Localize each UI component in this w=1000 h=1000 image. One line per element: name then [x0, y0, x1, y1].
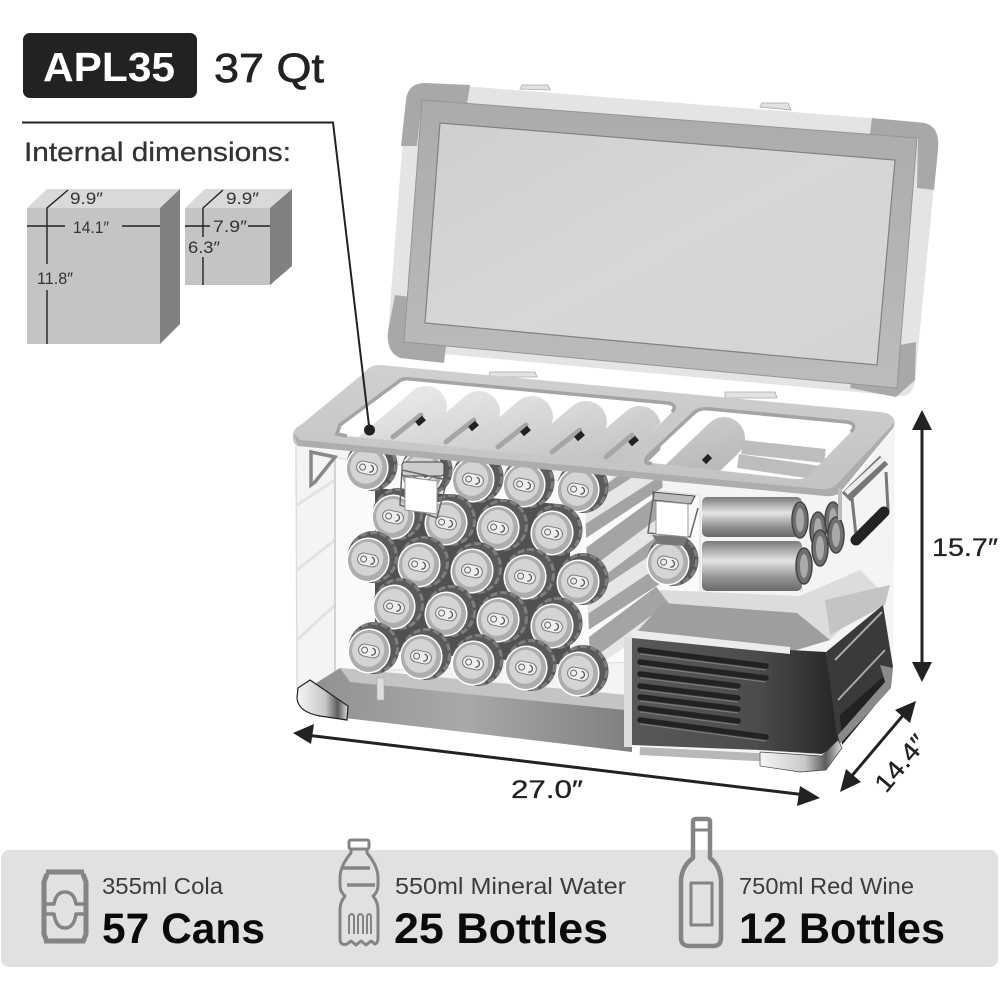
large compartment cube — [27, 189, 180, 344]
small compartment cube: 9.9″ — [226, 190, 259, 208]
water count: 25 Bottles — [394, 905, 608, 953]
cola label: 355ml Cola — [102, 873, 223, 899]
water label: 550ml Mineral Water — [395, 873, 626, 899]
small compartment cube: 6.3″ — [188, 239, 220, 257]
height dimension arrow — [912, 410, 932, 682]
compressor compartment — [624, 585, 893, 761]
depth dimension arrow — [840, 701, 916, 792]
internal dimensions heading: Internal dimensions: — [24, 137, 291, 167]
control side panel — [826, 605, 893, 745]
lid frame — [404, 100, 917, 388]
icon: can — [44, 872, 86, 942]
tray opening bevel — [337, 379, 854, 463]
left latch — [400, 462, 447, 518]
right back foot — [838, 665, 893, 744]
small compartment cube: 7.9″ — [213, 218, 247, 236]
large compartment cube: 11.8″ — [37, 270, 73, 288]
wine count: 12 Bottles — [739, 905, 945, 953]
right foot — [760, 740, 842, 772]
corner guards — [388, 83, 938, 397]
front face — [632, 635, 838, 754]
capacity panel — [1, 819, 998, 967]
tray front lip — [293, 422, 895, 496]
width label: 27.0″ — [511, 776, 583, 804]
lid outer strip — [388, 83, 938, 396]
large compartment cube: 9.9″ — [70, 190, 103, 208]
open lid — [388, 83, 938, 398]
transparent cooler body — [295, 425, 895, 770]
left foot — [297, 680, 348, 720]
tray rim — [293, 365, 894, 496]
right side handle — [840, 458, 888, 545]
small compartment floor — [660, 570, 880, 640]
dark backing between cans — [375, 488, 570, 665]
leader line with dot — [22, 122, 375, 436]
lid hinges — [489, 85, 791, 398]
cans stacked in large compartment — [341, 439, 608, 700]
standoff peg — [377, 678, 384, 700]
can cylinders behind — [585, 446, 669, 660]
model badge: APL35 — [43, 44, 175, 90]
wine label: 750ml Red Wine — [739, 873, 914, 899]
base floor — [302, 668, 632, 752]
cans in small compartment — [642, 497, 844, 591]
icon: wine bottle — [681, 819, 721, 946]
small compartment cube — [185, 189, 292, 285]
cola count: 57 Cans — [102, 905, 265, 953]
compartment top — [632, 603, 830, 652]
icon: water bottle — [340, 840, 378, 945]
vent slots — [640, 650, 766, 737]
lid glass panel — [425, 123, 895, 365]
width dimension arrow — [293, 724, 820, 806]
back-left handle — [311, 452, 335, 485]
depth label: 14.4″ — [869, 729, 933, 798]
capacity heading: 37 Qt — [214, 45, 325, 91]
right latch — [648, 492, 698, 546]
stored cylinders seen from above — [370, 407, 825, 482]
top tray with openings — [293, 365, 895, 496]
model badge — [23, 33, 197, 98]
tray opening interior — [337, 379, 675, 463]
height label: 15.7″ — [932, 534, 998, 562]
large compartment cube: 14.1″ — [73, 219, 109, 237]
